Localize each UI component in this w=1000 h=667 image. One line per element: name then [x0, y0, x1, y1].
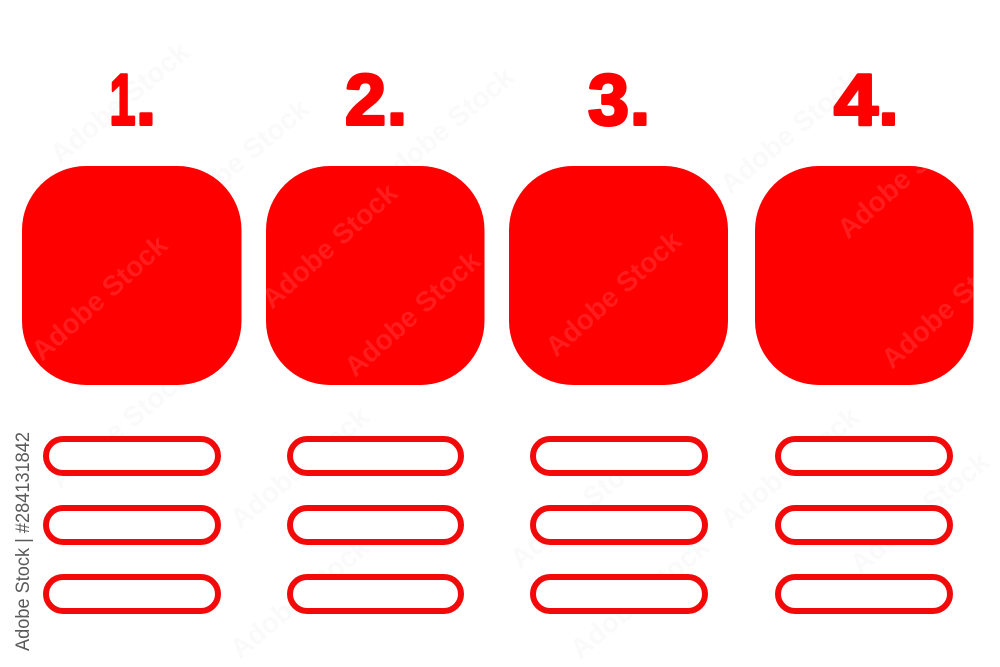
watermark on cards: Adobe Stock [255, 177, 404, 314]
watermark on background: Adobe Stock [369, 61, 520, 195]
pill 4-1 [778, 439, 950, 473]
pill 2-3 [290, 577, 461, 611]
panel: card 3 [509, 166, 728, 385]
column 4 [755, 60, 974, 611]
pill 3-2 [533, 508, 705, 542]
watermark on background: Adobe Stock [224, 531, 375, 665]
watermark on background: Adobe Stock [564, 531, 715, 665]
column 2 [266, 60, 484, 611]
watermark on background: Adobe Stock [164, 93, 315, 227]
pill 1-2 [46, 508, 218, 542]
watermark on background: Adobe Stock [224, 401, 375, 535]
watermark on cards [35, 166, 974, 378]
heading: 4.: . [878, 60, 899, 140]
watermark on cards: Adobe Stock [539, 225, 688, 362]
heading: 3.: 3 [588, 60, 629, 140]
watermark on background: Adobe Stock [714, 401, 865, 535]
pill 1-3 [46, 577, 218, 611]
watermark on cards: Adobe Stock [338, 245, 487, 382]
column 1 [22, 60, 242, 611]
heading: 1.: 1 [110, 60, 136, 140]
heading: 2. [345, 60, 407, 140]
heading: 2.: . [387, 60, 407, 140]
heading: 1.: . [136, 60, 156, 140]
pill 2-1 [290, 439, 461, 473]
watermark on background: Adobe Stock [504, 441, 655, 575]
side credit text: Adobe Stock | #284131842 [13, 432, 34, 651]
panel: card 2 [266, 166, 484, 385]
pill 3-1 [533, 439, 705, 473]
watermark on cards: Adobe Stock [25, 229, 174, 366]
pill 1-1 [46, 439, 218, 473]
panel: card 4 [755, 166, 974, 385]
watermark on background: Adobe Stock [714, 66, 865, 200]
pill 4-3 [778, 577, 950, 611]
heading: 4. [834, 60, 899, 140]
pill 4-2 [778, 508, 950, 542]
heading: 3. [588, 60, 650, 140]
panel: card 1 [22, 166, 242, 385]
pill 3-3 [533, 577, 705, 611]
heading: 2.: 2 [345, 60, 386, 140]
watermark on cards: Adobe Stock [831, 107, 980, 244]
watermark on background: Adobe Stock [44, 361, 195, 495]
heading: 4.: 4 [834, 60, 878, 140]
heading: 3.: . [630, 60, 650, 140]
pill 2-2 [290, 508, 461, 542]
watermark on background: Adobe Stock [44, 36, 195, 170]
column 3 [509, 60, 728, 611]
watermark on background: Adobe Stock [844, 446, 995, 580]
